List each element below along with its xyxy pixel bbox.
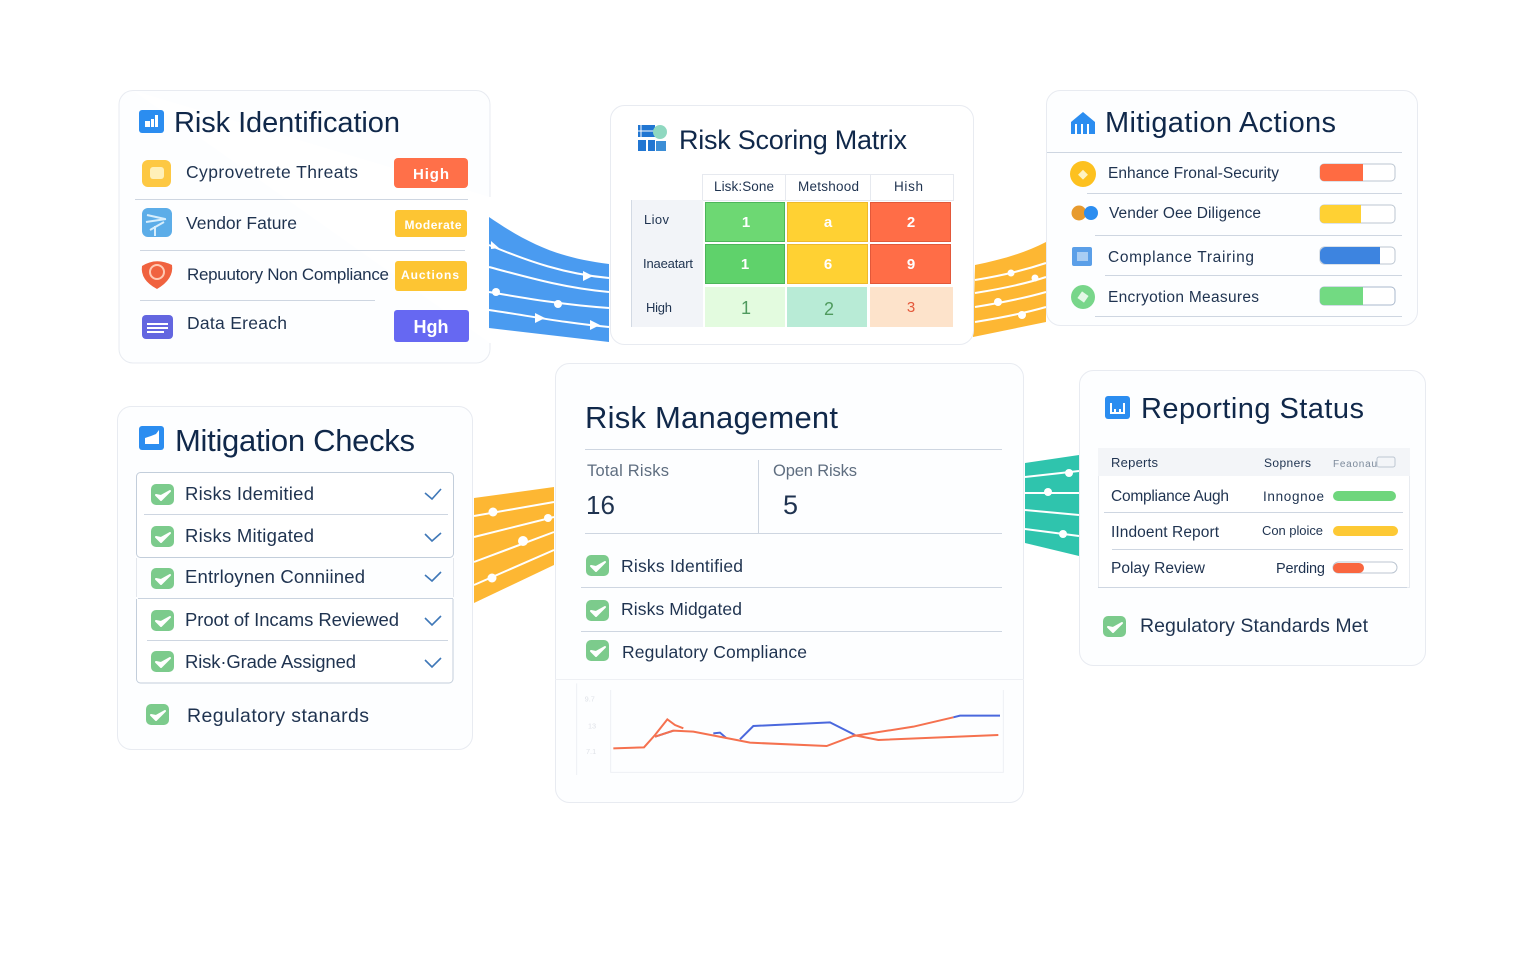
row: data breach: Data Ereach bbox=[187, 313, 287, 333]
item bbox=[151, 483, 441, 505]
row: vendor: Vender Oee Diligence bbox=[1109, 205, 1261, 222]
row: threats: Cyprovetrete Threats bbox=[186, 162, 358, 182]
row: Perding bbox=[1276, 561, 1325, 577]
panel: reporting status bbox=[1080, 370, 1426, 666]
line chart bbox=[577, 683, 1003, 775]
row: data breach bbox=[142, 310, 469, 342]
panel: risk identification bbox=[119, 90, 490, 363]
row: enhance bbox=[1070, 161, 1395, 187]
header: Reperts bbox=[1111, 455, 1158, 470]
row: vendor bbox=[1072, 205, 1395, 223]
matrix cells: 2 bbox=[824, 299, 834, 319]
matrix cells: 9 bbox=[907, 256, 915, 273]
matrix row labels: High bbox=[646, 300, 672, 315]
checklist bbox=[586, 555, 807, 662]
panel: mitigation checks bbox=[118, 406, 472, 750]
ribbon: blue connector bbox=[489, 217, 609, 342]
matrix cells: a bbox=[824, 214, 833, 231]
regulatory line: Regulatory stanards bbox=[187, 705, 369, 727]
row: Innognoe bbox=[1263, 489, 1324, 504]
line chart: 9.7 bbox=[585, 695, 595, 704]
row: threats: High bbox=[413, 166, 449, 183]
item bbox=[151, 566, 441, 589]
metric: total risks: 16 bbox=[586, 490, 615, 520]
item bbox=[151, 525, 441, 547]
checklist: Risks Identified bbox=[621, 556, 743, 576]
ribbon: teal connector bbox=[1025, 455, 1079, 556]
panel: mitigation actions bbox=[1046, 90, 1418, 326]
row: vendor bbox=[142, 208, 467, 237]
icon: building bbox=[1071, 112, 1095, 134]
matrix cells: 2 bbox=[907, 214, 915, 231]
header: Sopners bbox=[1264, 456, 1311, 470]
item: Risks Idemitied bbox=[185, 483, 314, 504]
item: Entrloynen Conniined bbox=[185, 566, 365, 587]
ribbon: amber connector top right bbox=[973, 242, 1046, 337]
matrix cells: 1 bbox=[741, 298, 751, 318]
row: data breach: Hgh bbox=[414, 317, 448, 337]
icon: blue chart bbox=[1105, 396, 1130, 419]
row bbox=[1111, 488, 1396, 505]
ribbon: amber connector left bbox=[474, 487, 554, 603]
row: Polay Review bbox=[1111, 560, 1206, 577]
row: Con ploice bbox=[1262, 523, 1323, 538]
status table bbox=[1098, 448, 1410, 588]
row: reputation: Auctions bbox=[401, 268, 459, 282]
panel: risk management bbox=[555, 364, 1024, 802]
regulatory line: Regulatory Standards Met bbox=[1140, 615, 1369, 637]
matrix cells bbox=[705, 202, 953, 327]
metric: total risks: Total Risks bbox=[587, 462, 669, 480]
metric: open risks bbox=[773, 462, 857, 520]
row: vendor: Moderate bbox=[404, 218, 462, 232]
line chart: 13 bbox=[588, 721, 596, 730]
header bbox=[1111, 455, 1395, 470]
row: training: Complance Trairing bbox=[1108, 249, 1254, 266]
heading: Mitigation Checks bbox=[175, 423, 415, 458]
metric: open risks: Open Risks bbox=[773, 462, 857, 480]
row: threats bbox=[142, 158, 468, 188]
matrix header: Metshood bbox=[798, 179, 859, 194]
matrix row labels: Inaeatart bbox=[643, 256, 693, 271]
matrix cells: 3 bbox=[907, 299, 915, 316]
item bbox=[151, 651, 441, 672]
row: encryption: Encryotion Measures bbox=[1108, 289, 1259, 306]
heading: Risk Scoring Matrix bbox=[679, 125, 908, 155]
matrix header: Hish bbox=[894, 179, 923, 194]
heading: Mitigation Actions bbox=[1105, 107, 1336, 139]
item: Risk·Grade Assigned bbox=[185, 651, 356, 672]
icon: matrix grid bbox=[638, 125, 667, 151]
icon: blue chart bbox=[139, 110, 164, 133]
checklist: Regulatory Compliance bbox=[622, 642, 807, 662]
row bbox=[1111, 560, 1397, 577]
metric: open risks: 5 bbox=[783, 490, 798, 520]
line chart: 7.1 bbox=[586, 747, 596, 756]
matrix row labels: Liov bbox=[644, 212, 670, 227]
heading: Risk Management bbox=[585, 400, 838, 435]
row: encryption bbox=[1071, 285, 1395, 309]
row: vendor: Vendor Fature bbox=[186, 213, 297, 233]
row: enhance: Enhance Fronal-Security bbox=[1108, 165, 1279, 182]
item: Proot of Incams Reviewed bbox=[185, 609, 399, 630]
row: Compliance Augh bbox=[1111, 488, 1229, 505]
header: Feaonau bbox=[1333, 459, 1377, 470]
row: reputation: Repuutory Non Compliance bbox=[187, 265, 389, 284]
metric: total risks bbox=[586, 462, 669, 520]
row bbox=[1111, 523, 1398, 541]
matrix header bbox=[702, 174, 954, 200]
icon: blue chart bbox=[139, 426, 164, 450]
row: IIndoent Report bbox=[1111, 524, 1220, 541]
checklist: Risks Midgated bbox=[621, 599, 742, 619]
matrix cells: 1 bbox=[742, 214, 750, 231]
item: Risks Mitigated bbox=[185, 525, 314, 546]
heading: Risk Identification bbox=[174, 107, 400, 139]
heading: Reporting Status bbox=[1141, 393, 1364, 425]
matrix cells: 6 bbox=[824, 256, 832, 273]
panel: risk scoring matrix bbox=[610, 106, 974, 344]
matrix row labels bbox=[631, 200, 703, 327]
row: reputation bbox=[142, 261, 467, 291]
matrix header: Lisk:Sone bbox=[714, 179, 774, 194]
checklist table bbox=[136, 472, 454, 683]
row: training bbox=[1072, 247, 1395, 266]
matrix cells: 1 bbox=[741, 256, 749, 273]
